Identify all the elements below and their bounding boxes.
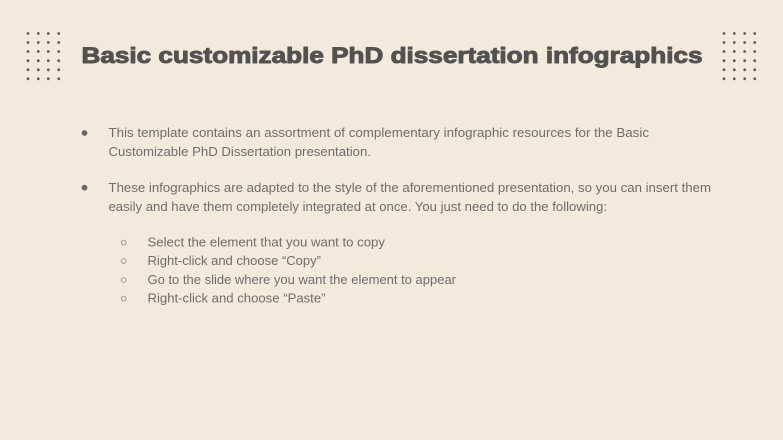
bullet: first paragraph [82,130,87,136]
step 2: Right-click and choose “Copy” [148,253,321,268]
text block: second paragraph: These infographics are adapted to the style of the aforementioned presentation, so you can insert them [108,180,711,195]
title: Basic customizable PhD dissertation infographics [82,43,702,68]
icon: right dot grid [723,32,756,80]
text block: first paragraph [108,125,649,159]
text block: second paragraph [108,180,711,214]
bullet: second paragraph [82,185,87,191]
text block: first paragraph: This template contains an assortment of complementary infographic resources for the Basic [108,125,649,140]
icon: left dot grid [27,32,60,80]
step 4: Right-click and choose “Paste” [148,290,326,306]
text block: first paragraph: Customizable PhD Dissertation presentation. [108,144,371,159]
step 3: Go to the slide where you want the element to appear [148,272,457,287]
list: copy and paste steps [121,234,457,306]
step 1: Select the element that you want to copy [148,234,385,250]
text block: second paragraph: easily and have them completely integrated at once. You just need to do the following: [108,199,607,214]
